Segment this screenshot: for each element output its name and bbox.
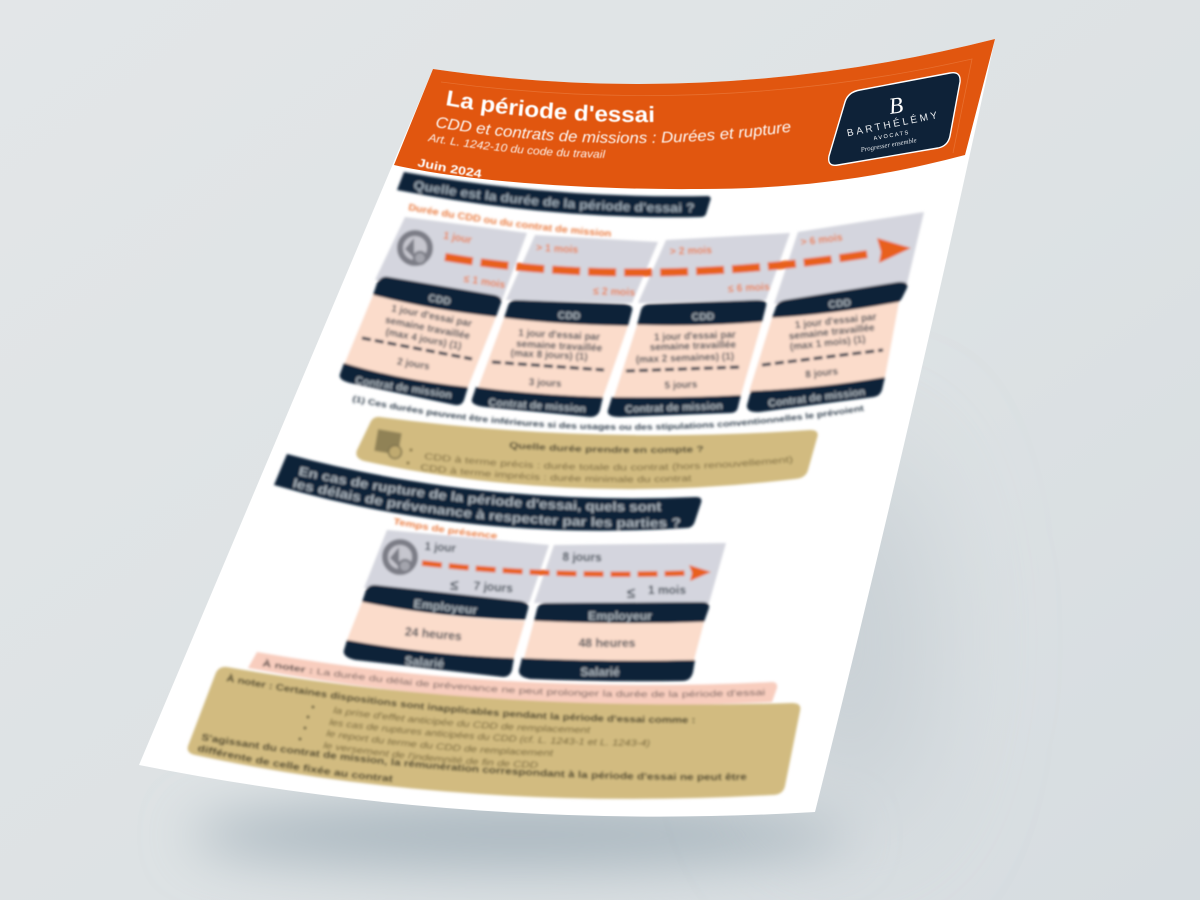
column 2: (max 8 jours) (1) xyxy=(510,348,588,363)
column 4: > 6 mois xyxy=(800,231,844,249)
grey timeline cell xyxy=(774,212,924,304)
note: gold: S'agissant du contrat de mission, la rémunération correspondant à la période d'essai ne peut être xyxy=(200,732,748,784)
column 2: semaine travaillée xyxy=(516,339,603,354)
heading bar: notice: les délais de prévenance à respecter par les parties ? xyxy=(290,476,682,532)
column: first period: Employeur xyxy=(413,597,478,617)
column: second period: 8 jours xyxy=(562,550,602,564)
CDD tab xyxy=(772,282,907,318)
column: first period: 1 jour xyxy=(424,541,457,555)
mission tab xyxy=(340,363,468,405)
sheet xyxy=(139,39,995,817)
column: first period: ≤ xyxy=(450,577,459,594)
column: first period: 24 heures xyxy=(404,625,463,643)
column: second period: 1 mois xyxy=(648,583,686,597)
grey timeline cell xyxy=(506,235,658,303)
date: Juin 2024 xyxy=(417,158,482,178)
logo: B xyxy=(887,92,905,119)
column 1: semaine travaillée xyxy=(384,315,471,342)
column: second period: Employeur xyxy=(588,609,652,623)
column 1: 2 jours xyxy=(396,357,431,373)
heading bar: duration: Quelle est la durée de la période d'essai ? xyxy=(412,178,696,214)
note: gold: À noter : Certaines dispositions sont inapplicables pendant la période d'essai comme : xyxy=(226,672,696,724)
grey timeline cell xyxy=(638,233,790,303)
mission tab xyxy=(608,395,741,417)
peach body xyxy=(347,602,525,658)
column 3: 1 jour d'essai par xyxy=(654,330,736,343)
grey timeline cell xyxy=(364,530,549,603)
column 1: CDD xyxy=(427,292,452,308)
column 1 xyxy=(340,217,527,405)
column 2: 1 jour d'essai par xyxy=(518,328,600,343)
callout: which duration: Quelle durée prendre en compte ? xyxy=(508,440,704,456)
column 1: Contrat de mission xyxy=(354,374,453,402)
column 2: Contrat de mission xyxy=(488,397,586,415)
peach body xyxy=(478,318,628,397)
peach body xyxy=(749,302,899,392)
note: gold: les cas de ruptures anticipées du CDD (cf. L. 1243-1 et L. 1243-4) xyxy=(328,718,651,748)
CDD tab xyxy=(637,300,766,326)
column 3: Contrat de mission xyxy=(625,400,723,416)
column 4: Contrat de mission xyxy=(767,386,866,410)
column 4: (max 1 mois) (1) xyxy=(789,334,866,353)
column: second period: 48 heures xyxy=(579,636,636,650)
column: first period: 7 jours xyxy=(473,579,514,595)
column 3 xyxy=(608,233,790,417)
callout: which duration xyxy=(354,415,820,491)
callout: which duration: CDD à terme précis : durée totale du contrat (hors renouvellement) xyxy=(424,452,794,472)
note: gold: différente de celle fixée au contrat xyxy=(196,744,394,783)
icon: calendar xyxy=(374,429,402,458)
section 2: notice periods xyxy=(186,452,802,800)
column 2: > 1 mois xyxy=(536,242,579,256)
label: time present: Temps de présence xyxy=(392,516,498,540)
mission tab xyxy=(747,377,885,412)
grey timeline cell xyxy=(534,543,726,603)
legal reference: Art. L. 1242-10 du code du travail xyxy=(427,134,606,159)
column 2: CDD xyxy=(558,310,581,322)
column 4: CDD xyxy=(828,297,852,311)
column 3: (max 2 semaines) (1) xyxy=(636,351,734,366)
peach body xyxy=(524,621,704,661)
section 1: duration xyxy=(338,170,924,491)
column 2 xyxy=(472,235,658,417)
column: first period xyxy=(344,530,549,677)
column 1: 1 jour xyxy=(442,230,473,246)
note: gold: la prise d'effet anticipée du CDD de remplacement xyxy=(332,706,591,734)
label: contract duration: Durée du CDD ou du contrat de mission xyxy=(407,202,612,238)
column 3: semaine travaillée xyxy=(650,339,737,354)
peach body xyxy=(614,322,762,397)
column: first period: Salarié xyxy=(404,653,445,671)
column 1: (max 4 jours) (1) xyxy=(385,327,462,352)
note: gold: le versement de l'indemnité de fin de CDD xyxy=(322,742,539,769)
column 2: ≤ 2 mois xyxy=(593,285,635,299)
title: La période d'essai xyxy=(446,90,654,124)
logo xyxy=(829,73,960,165)
note: gold xyxy=(186,665,802,800)
column: second period: Salarié xyxy=(580,665,620,679)
column 3: ≤ 6 mois xyxy=(728,281,770,295)
icon: clock gear xyxy=(385,542,415,572)
column: second period: ≤ xyxy=(627,585,635,602)
heading bar: duration xyxy=(396,170,712,220)
column 4 xyxy=(747,212,924,412)
callout: which duration: CDD à terme imprécis : durée minimale du contrat xyxy=(420,464,692,484)
header banner xyxy=(394,39,995,190)
icon: clock gear xyxy=(400,233,430,264)
note: pink: À noter : La durée du délai de prévenance ne peut prolonger la durée de la période d'essai xyxy=(262,658,766,700)
column 1: 1 jour d'essai par xyxy=(390,303,473,330)
column: second period xyxy=(519,543,726,681)
column 3: CDD xyxy=(691,311,715,323)
arrow: duration timeline xyxy=(445,238,911,273)
sheet shadow xyxy=(190,450,920,869)
column 1: ≤ 1 mois xyxy=(463,273,506,291)
peach body xyxy=(344,295,496,387)
heading bar: notice xyxy=(272,452,704,533)
column 3: 5 jours xyxy=(664,379,698,392)
salaried tab xyxy=(344,640,514,677)
employer tab xyxy=(534,602,709,623)
salaried tab xyxy=(519,658,695,681)
logo: Progresser ensemble xyxy=(859,137,917,154)
column 2: 3 jours xyxy=(528,377,562,390)
column 4: 8 jours xyxy=(805,366,839,381)
footnote: (1) Ces durées peuvent être inférieures si des usages ou des stipulations conventionnelles le prévoient xyxy=(350,394,866,433)
logo: AVOCATS xyxy=(873,130,910,142)
column 4: semaine travaillée xyxy=(788,322,876,342)
logo: BARTHÉLÉMY xyxy=(846,108,941,139)
subtitle: CDD et contrats de missions : Durées et rupture xyxy=(436,116,792,144)
CDD tab xyxy=(373,277,501,317)
CDD tab xyxy=(504,300,632,326)
arrow: notice timeline xyxy=(422,563,711,581)
employer tab xyxy=(362,585,528,620)
note: gold: le report du terme du CDD de remplacement xyxy=(326,730,554,757)
mission tab xyxy=(472,387,603,417)
heading bar: notice: En cas de rupture de la période d'essai, quels sont xyxy=(296,464,664,516)
column 3: > 2 mois xyxy=(670,244,712,258)
grey timeline cell xyxy=(375,217,527,300)
column 4: 1 jour d'essai par xyxy=(794,312,877,331)
